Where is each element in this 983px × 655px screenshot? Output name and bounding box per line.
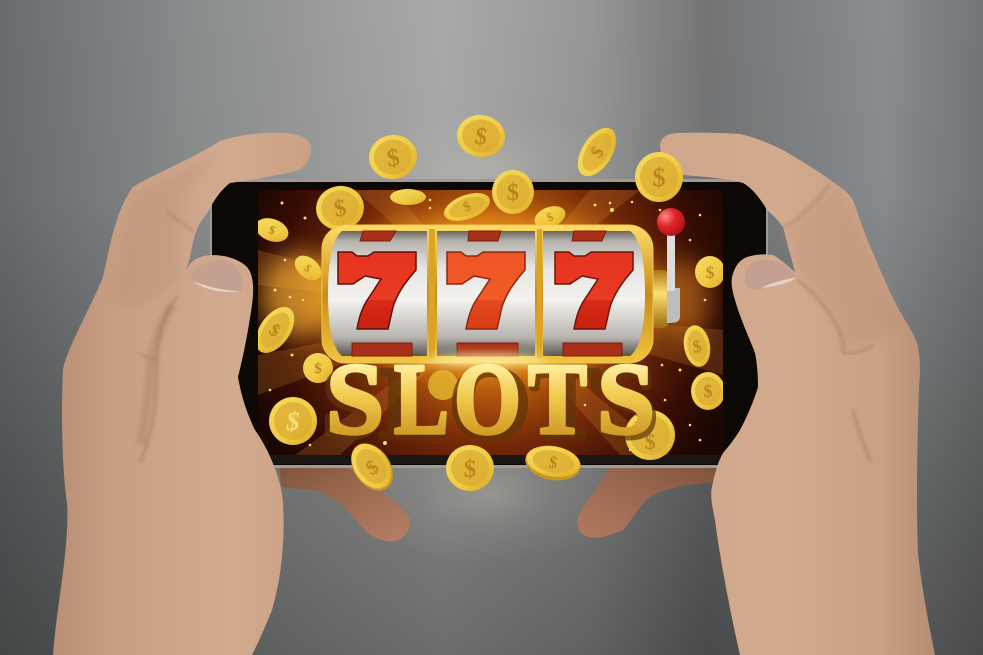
- coin: [290, 251, 326, 285]
- coin: [570, 121, 624, 183]
- reel separators: [429, 229, 542, 358]
- sparkles: [269, 199, 706, 451]
- coin: $: [704, 381, 712, 401]
- lever: [646, 208, 685, 328]
- right thumb crease: [797, 280, 843, 354]
- coin: [342, 435, 402, 499]
- gold frame: [322, 225, 653, 363]
- right thumbnail: [745, 260, 795, 290]
- coin: $: [267, 222, 277, 238]
- partial sevens: [352, 231, 622, 356]
- phone screen: [258, 190, 723, 455]
- coin: $: [464, 456, 476, 483]
- coin: $: [314, 361, 322, 377]
- coin: [258, 307, 294, 353]
- right finger fold: [783, 184, 830, 227]
- right palm crease: [853, 410, 871, 462]
- coin: $: [706, 263, 715, 282]
- left thumb crease: [140, 296, 178, 463]
- coin: [303, 353, 333, 383]
- coin: [313, 182, 367, 234]
- SLOTS shadow: SLOTS: [322, 347, 658, 460]
- letter S: S: [326, 343, 384, 456]
- lower fingers behind phone, left: [278, 462, 410, 542]
- coin: [522, 441, 584, 485]
- coin: $: [473, 123, 489, 151]
- coin: $: [385, 144, 401, 173]
- seven 3: [555, 252, 633, 329]
- coin: $: [266, 319, 284, 341]
- coin: $: [545, 209, 555, 225]
- SLOTS title: [322, 343, 658, 460]
- coin: [454, 112, 508, 160]
- left nail tip: [194, 282, 240, 292]
- left hand: [53, 133, 311, 655]
- coin: [532, 202, 568, 232]
- coin: [269, 397, 317, 445]
- reels: [328, 231, 645, 356]
- coins in the foreground: [342, 112, 683, 499]
- coin: [366, 132, 420, 182]
- seven 1: [338, 252, 416, 329]
- right hand: [660, 133, 935, 655]
- left knuckle fold: [137, 352, 157, 360]
- coin: [625, 410, 675, 460]
- coin: $: [461, 199, 473, 216]
- light flare: [427, 354, 547, 366]
- coin: $: [652, 163, 666, 192]
- coin: $: [507, 180, 519, 206]
- coin: [635, 152, 683, 202]
- coin: $: [644, 429, 656, 454]
- right knuckle fold: [843, 345, 873, 354]
- coin: $: [286, 407, 300, 436]
- left finger shading: [110, 150, 222, 308]
- coins behind slot machine: [248, 170, 725, 460]
- left thumbnail: [190, 260, 242, 291]
- lower fingers behind phone, right: [577, 462, 715, 537]
- coin: [390, 189, 426, 205]
- slot machine: [310, 208, 685, 373]
- coin: $: [691, 336, 703, 357]
- seven 2: [447, 252, 525, 329]
- left thumb shadow: [140, 305, 172, 445]
- right nail tip: [762, 277, 796, 288]
- coin: [258, 218, 288, 242]
- coin: [428, 370, 458, 400]
- coin: [492, 170, 534, 214]
- coin: [446, 445, 494, 491]
- coin: $: [332, 195, 348, 223]
- letter S: S: [597, 343, 655, 456]
- coin: [681, 323, 713, 369]
- phone: [210, 179, 768, 468]
- letter L: L: [394, 343, 449, 456]
- letter O: O: [454, 343, 521, 456]
- letter T: T: [528, 343, 587, 456]
- coin: [691, 372, 725, 410]
- coin: [695, 256, 725, 288]
- coin: $: [547, 452, 559, 473]
- coin: [440, 188, 494, 226]
- left finger fold: [167, 212, 193, 231]
- coin: $: [586, 143, 608, 161]
- coin: $: [301, 262, 314, 275]
- coin: $: [362, 456, 383, 480]
- right finger shading: [785, 185, 905, 345]
